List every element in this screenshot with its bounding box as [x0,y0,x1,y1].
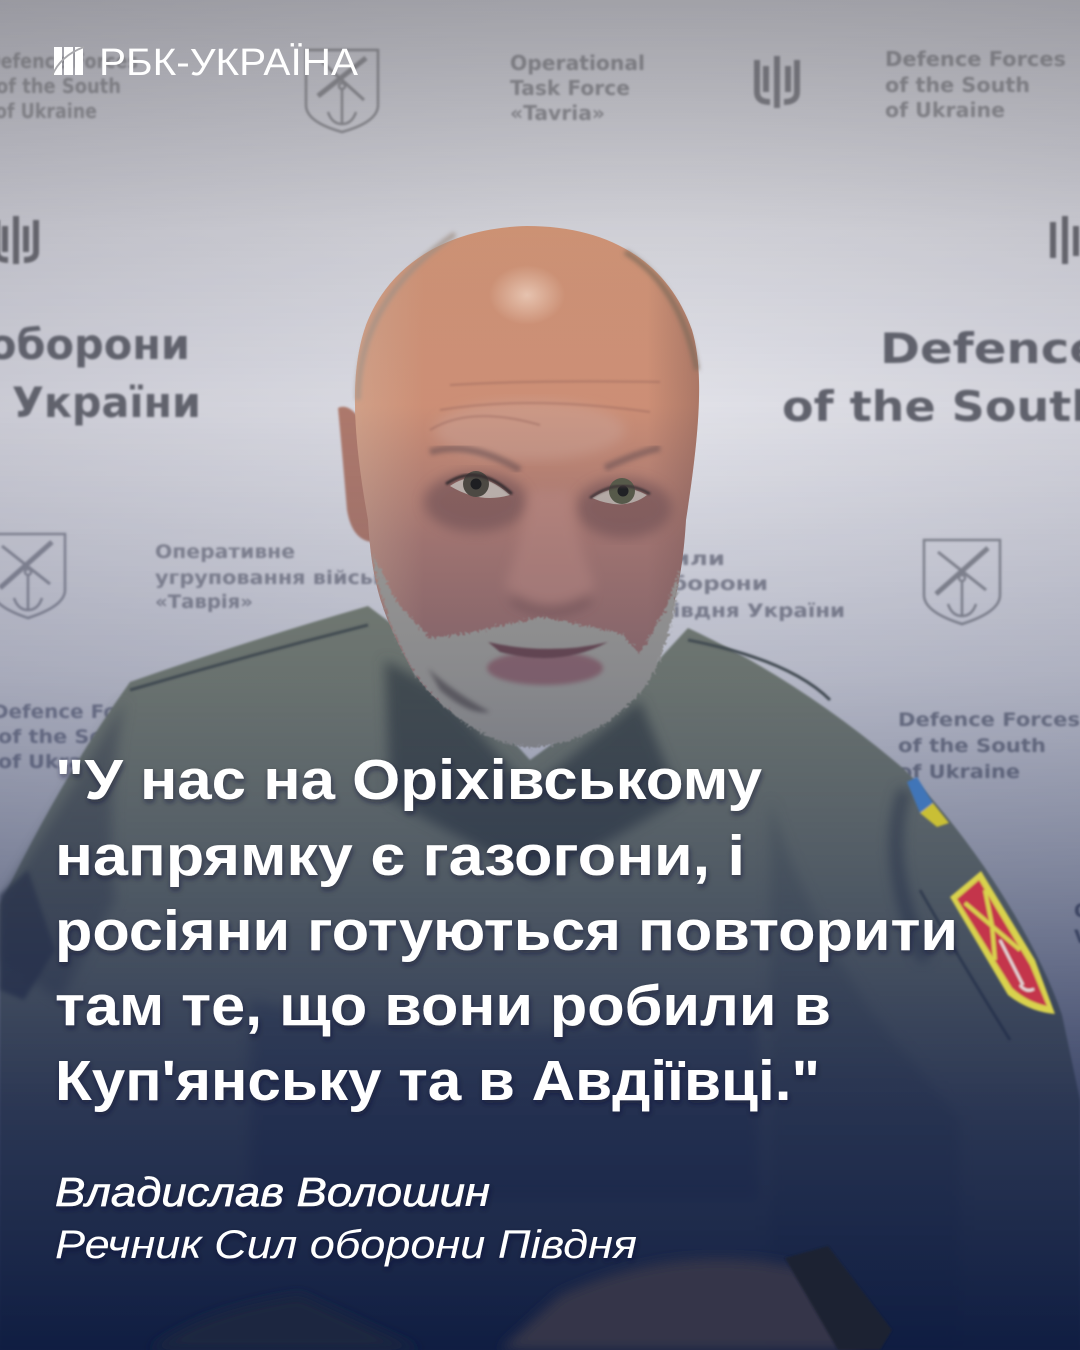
backdrop shield top [306,50,378,132]
backdrop logos and lettering [0,47,1080,948]
logo: РБК-Україна [52,42,359,84]
shirt [0,606,1080,1350]
backdrop large text ukrainian: України [12,378,201,427]
backdrop large text english: Defence [880,324,1080,373]
quote text [55,748,958,1113]
quote text: росіяни готуються повторити [55,899,958,963]
backdrop text lower right: Defence Forces [898,709,1080,731]
speaker name: Владислав Волошин [55,1169,490,1215]
ear [338,407,372,542]
icon: ukrainian flag pin [907,777,949,827]
backdrop trident left [0,216,36,264]
quote text: "У нас на Оріхівському [55,748,762,812]
backdrop text southern forces: Сили [655,548,725,570]
backdrop trident right [1053,216,1080,264]
beard [372,553,680,747]
backdrop text lower left: of Ukraine [0,751,118,773]
backdrop large text ukrainian [0,320,201,427]
backdrop text top right: of the South [885,73,1030,97]
backdrop text operational task force [510,51,645,125]
side shading [355,226,699,738]
backdrop text lower right: of Ukraine [898,761,1020,783]
skull and cheeks [355,226,699,738]
left sleeve patch [0,870,55,1000]
backdrop text far right [1074,900,1080,948]
backdrop text operative grouping: Оперативне [155,541,295,563]
right eye [590,478,650,504]
forearms and hands [150,1259,860,1350]
backdrop text operational task force: Operational [510,51,645,75]
hairline stubble [358,234,697,400]
backdrop text top left: of the South [0,74,121,98]
backdrop text top right: Defence Forces [885,47,1066,71]
backdrop text operative grouping [155,541,387,613]
lower lip and chin skin [487,651,603,685]
backdrop large text english: of the South [782,382,1080,431]
backdrop text lower right: of the South [898,735,1046,757]
backdrop text top left [0,49,138,123]
backdrop text top right [885,47,1066,122]
brow ridge light patch [435,400,625,460]
eye sockets [424,472,672,538]
backdrop shield left [0,534,65,618]
left eye [446,471,512,498]
backdrop text operative grouping: «Таврія» [155,591,253,613]
quote text: там те, що вони робили в [55,974,831,1038]
head and face [355,226,699,747]
attribution [55,1169,637,1267]
backdrop text lower right [898,709,1080,783]
forehead wrinkles [430,381,660,430]
collar lines [130,625,1010,1040]
backdrop text top right: of Ukraine [885,98,1005,122]
backdrop trident top [757,56,797,108]
backdrop text lower left [0,701,164,773]
quote text: Куп'янську та в Авдіївці." [55,1049,820,1113]
backdrop text southern forces: Півдня України [655,600,845,622]
quote text: напрямку є газогони, і [55,824,745,888]
shirt folds and shadows [0,660,960,1350]
backdrop text operational task force: Task Force [510,76,630,100]
forehead highlight [489,265,565,325]
logo mark [52,47,84,76]
nose [505,490,595,611]
eyebrows [430,448,660,470]
backdrop text lower left: of the South [0,726,143,748]
beard dark patch [428,668,490,713]
speaker role: Речник Сил оборони Півдня [55,1223,637,1267]
backdrop text operational task force: «Tavria» [510,101,605,125]
backdrop shield right [924,540,1000,624]
logo wordmark: РБК-УКРАЇНА [99,42,359,84]
backdrop text operative grouping: угруповання військ [155,567,387,589]
backdrop text southern forces [655,548,845,622]
backdrop text southern forces: оборони [655,573,768,595]
icon: unit shoulder patch [950,871,1055,1014]
wristwatch [785,1246,892,1350]
backdrop large text english [782,324,1080,431]
mouth [488,642,608,658]
